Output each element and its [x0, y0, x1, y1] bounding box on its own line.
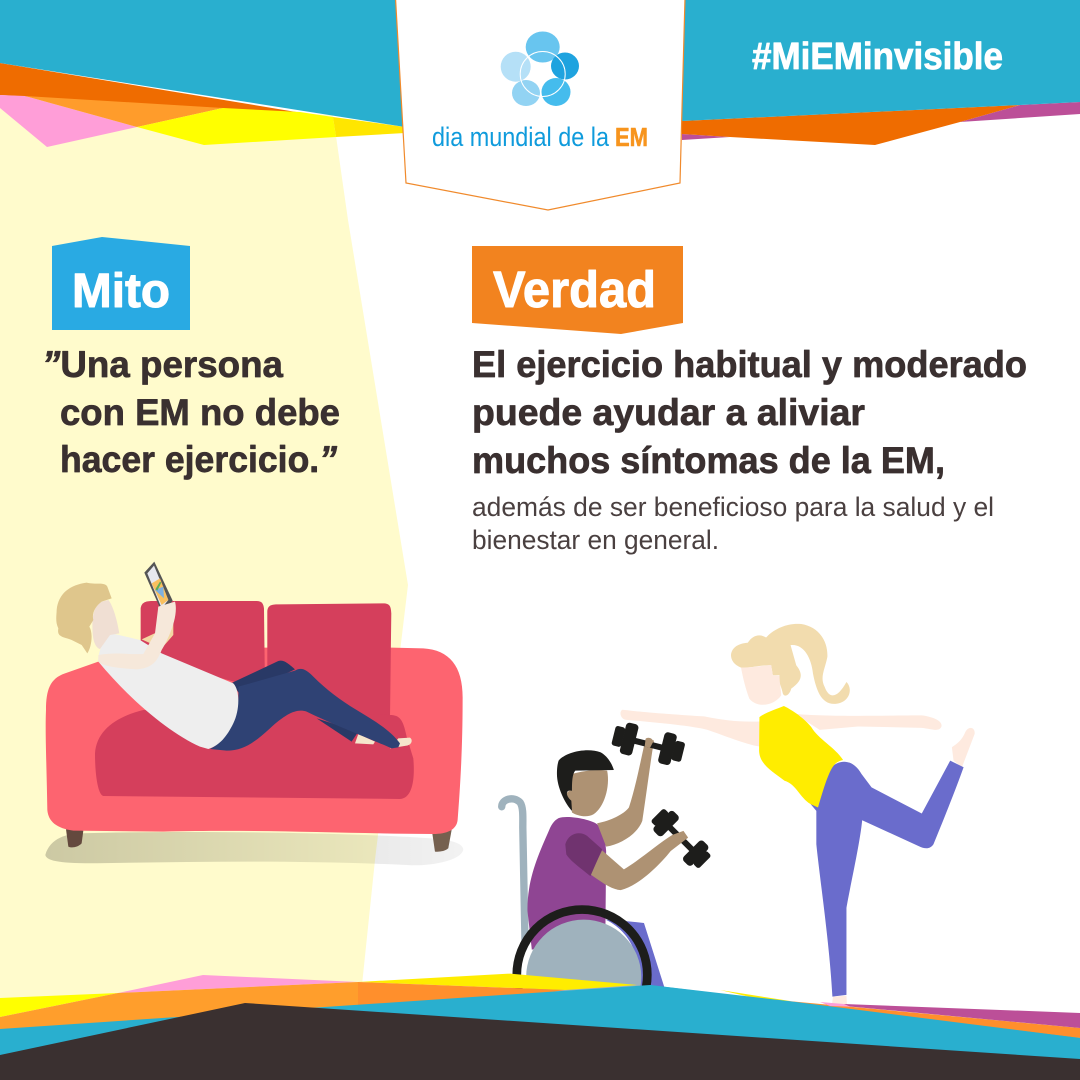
dumbbell: upper — [610, 720, 687, 768]
illustration: woman in yoga pose — [620, 624, 975, 1008]
badge: Verdad: Verdad — [493, 261, 656, 318]
shirt — [527, 817, 606, 950]
face — [741, 665, 781, 705]
wheel — [517, 910, 647, 1040]
badge: Verdad — [472, 246, 683, 334]
hashtag: #MiEMinvisible — [752, 36, 1003, 78]
badge: Mito: Mito — [72, 265, 170, 318]
person — [56, 562, 412, 751]
myth quote: con EM no debe — [60, 392, 340, 433]
illustration: man lying on sofa with phone — [45, 562, 463, 865]
truth heading: El ejercicio habitual y moderado — [472, 344, 1027, 385]
wheelchair handle — [502, 799, 525, 948]
sofa shadow — [45, 832, 463, 865]
sleeve — [565, 833, 602, 876]
top banner left — [0, 0, 405, 147]
sofa legs — [66, 829, 452, 852]
truth heading: puede ayudar a aliviar — [472, 392, 865, 433]
sofa body — [46, 648, 463, 834]
cream background panel: myth — [0, 100, 408, 1005]
truth body text: bienestar en general. — [472, 525, 719, 555]
front arm — [590, 831, 688, 890]
arms — [620, 710, 975, 767]
truth body text — [472, 492, 994, 555]
logo wordmark: EM — [615, 122, 648, 152]
myth quote: hacer ejercicio.” — [60, 439, 337, 480]
truth heading — [472, 344, 1027, 481]
raised arm — [597, 739, 654, 847]
leggings — [811, 761, 964, 997]
hair — [557, 750, 614, 811]
sofa cushions — [95, 601, 414, 799]
wheel background — [518, 911, 646, 1038]
logo wordmark: dia mundial de la — [432, 122, 610, 152]
seat — [605, 920, 666, 992]
foot on floor — [831, 996, 847, 1008]
head — [565, 770, 608, 816]
truth heading: muchos síntomas de la EM, — [472, 440, 945, 481]
bottom banner — [0, 974, 1080, 1080]
badge: Mito — [52, 237, 190, 330]
logo shield — [396, 0, 685, 210]
truth body text: además de ser beneficioso para la salud y el — [472, 492, 994, 522]
dumbbell: lower — [647, 805, 715, 872]
myth quote: ”Una persona — [42, 344, 283, 385]
ponytail hair — [731, 624, 850, 704]
myth quote — [42, 344, 340, 480]
top — [759, 706, 843, 807]
illustration: man in wheelchair lifting dumbbells — [502, 720, 715, 1040]
logo flower — [501, 32, 579, 106]
top banner right — [682, 0, 1080, 145]
